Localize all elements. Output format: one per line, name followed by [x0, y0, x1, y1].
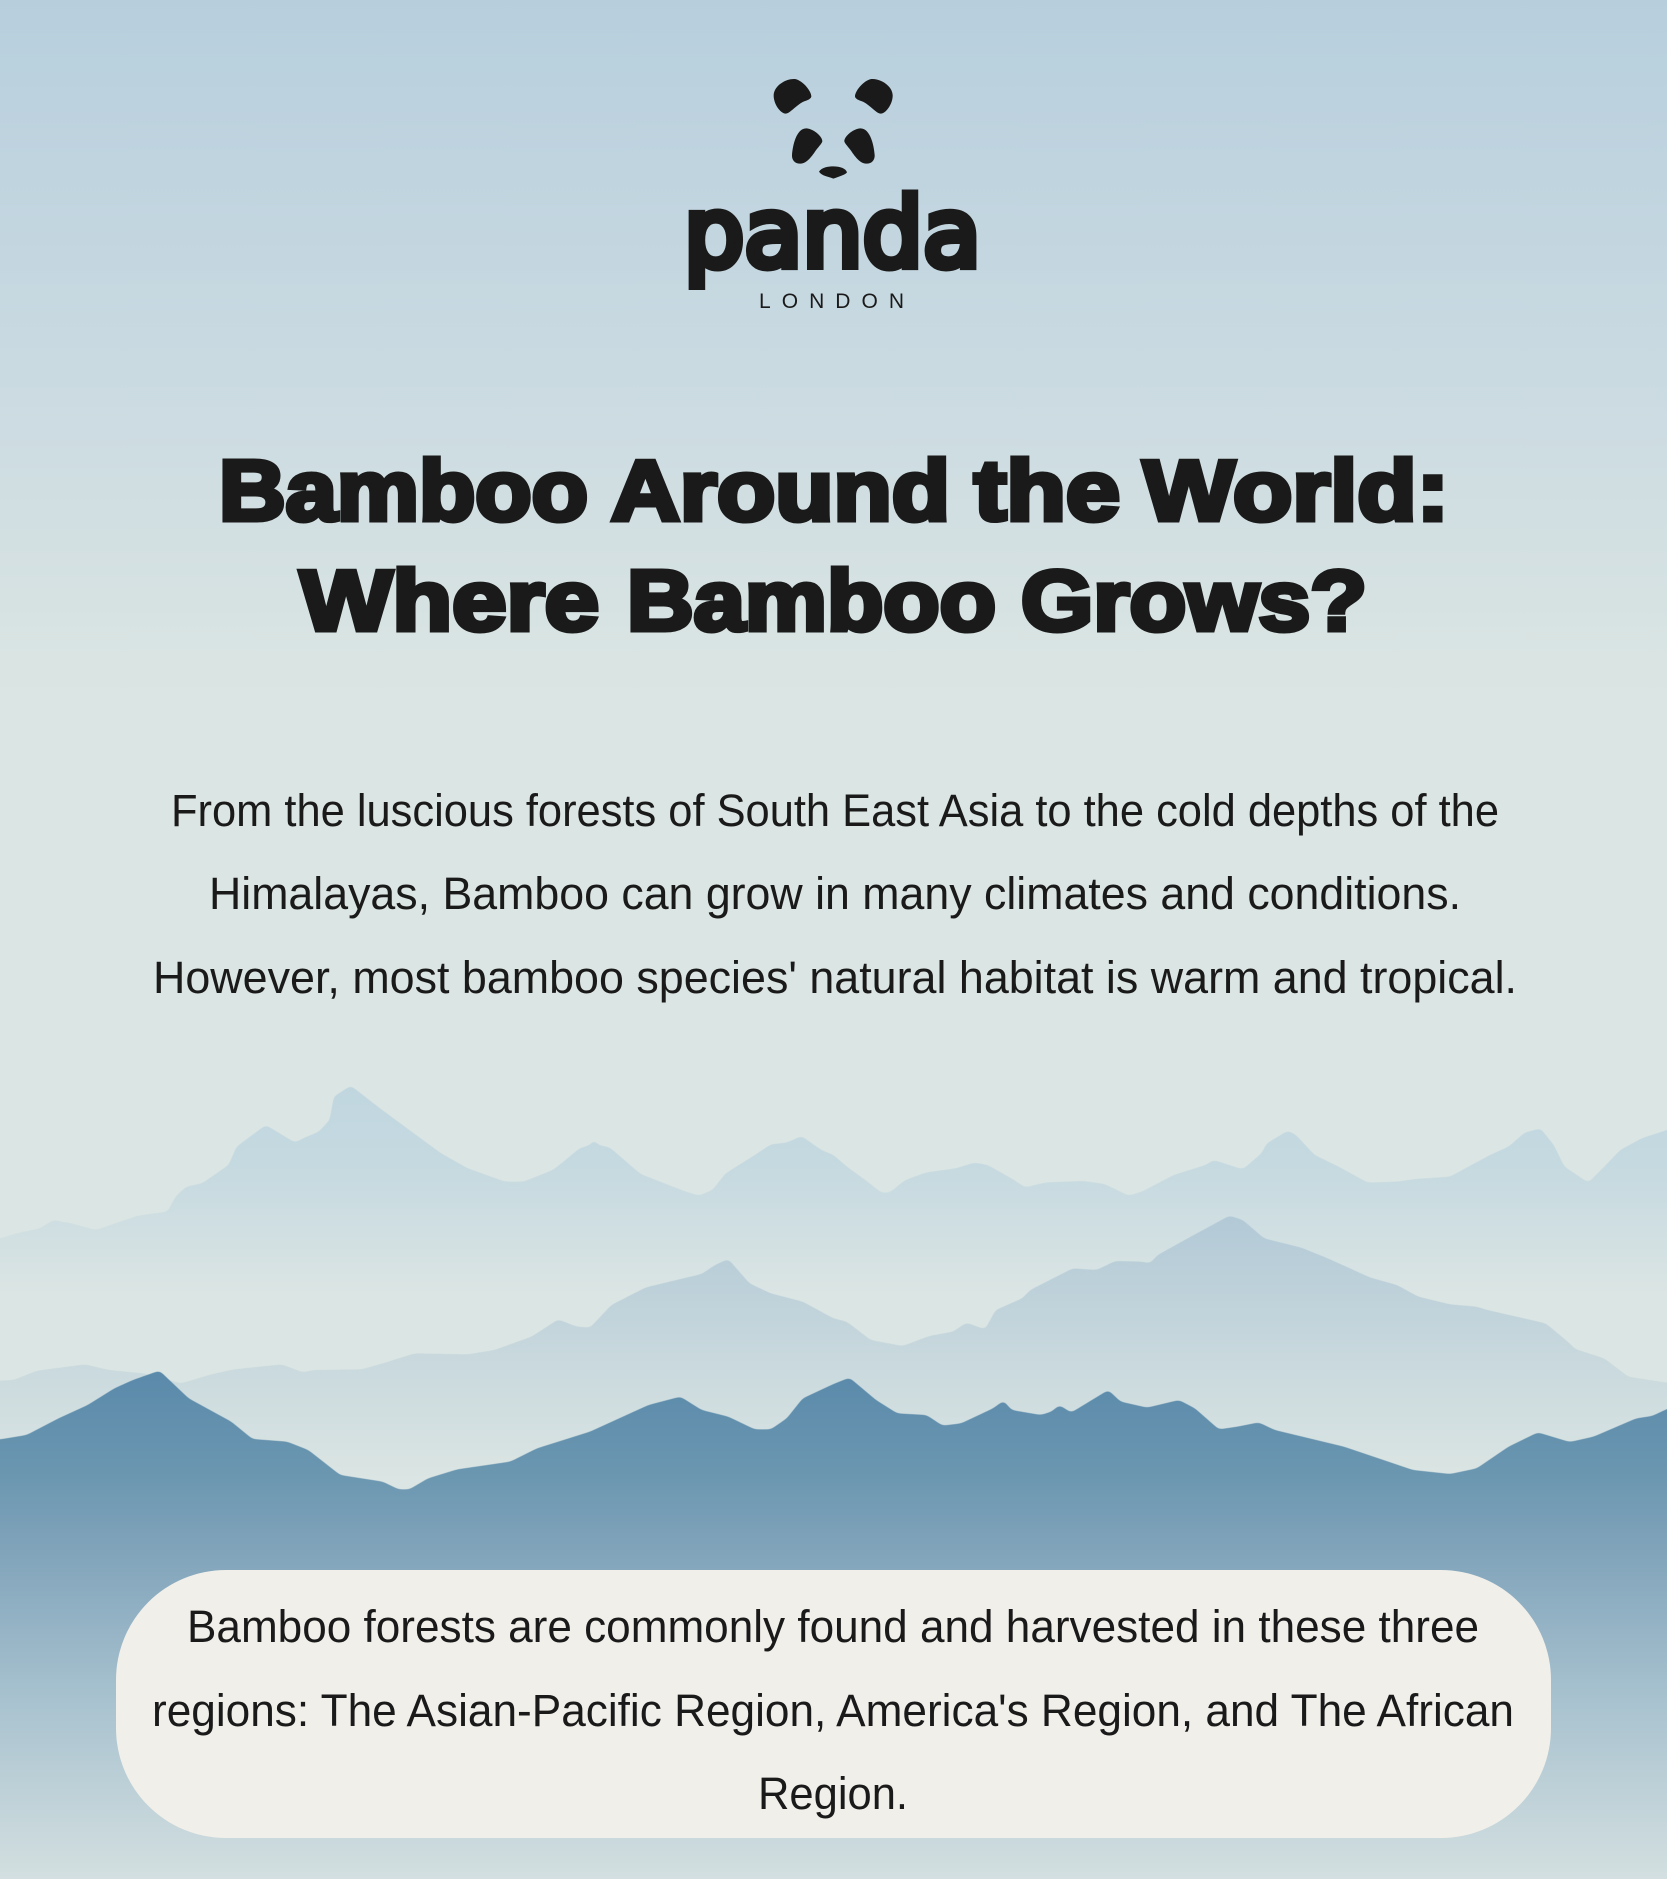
intro text block: Himalayas, Bamboo can grow in many climates and conditions. [209, 868, 1461, 919]
callout text [152, 1601, 1514, 1819]
callout background pill [116, 1570, 1551, 1838]
front mountain range [0, 1371, 1667, 1879]
title: Bamboo [219, 444, 588, 539]
title: Bamboo [627, 554, 996, 649]
callout panel: three regions [116, 1570, 1551, 1838]
intro text block: From the luscious forests of South East Asia to the cold depths of the [171, 785, 1499, 836]
callout text: Region. [758, 1768, 908, 1819]
icon: panda face [774, 79, 893, 179]
title: World: [1143, 444, 1449, 539]
intro text block: However, most bamboo species' natural habitat is warm and tropical. [153, 952, 1517, 1003]
mountain landscape [0, 1086, 1667, 1879]
logo: panda london [684, 79, 981, 313]
callout text: Bamboo forests are commonly found and harvested in these three [187, 1601, 1479, 1652]
middle mountain range [0, 1216, 1667, 1517]
title: Grows? [1021, 554, 1367, 649]
back mountain range [0, 1086, 1667, 1290]
title: Where [300, 554, 599, 649]
logo subtitle: LONDON [759, 290, 904, 313]
logo wordmark: panda [684, 179, 981, 289]
callout text: regions: The Asian-Pacific Region, America's Region, and The African [152, 1685, 1514, 1736]
title: the [974, 444, 1120, 539]
title [219, 444, 1449, 649]
intro text block [153, 785, 1517, 1003]
title: Around [611, 444, 950, 539]
